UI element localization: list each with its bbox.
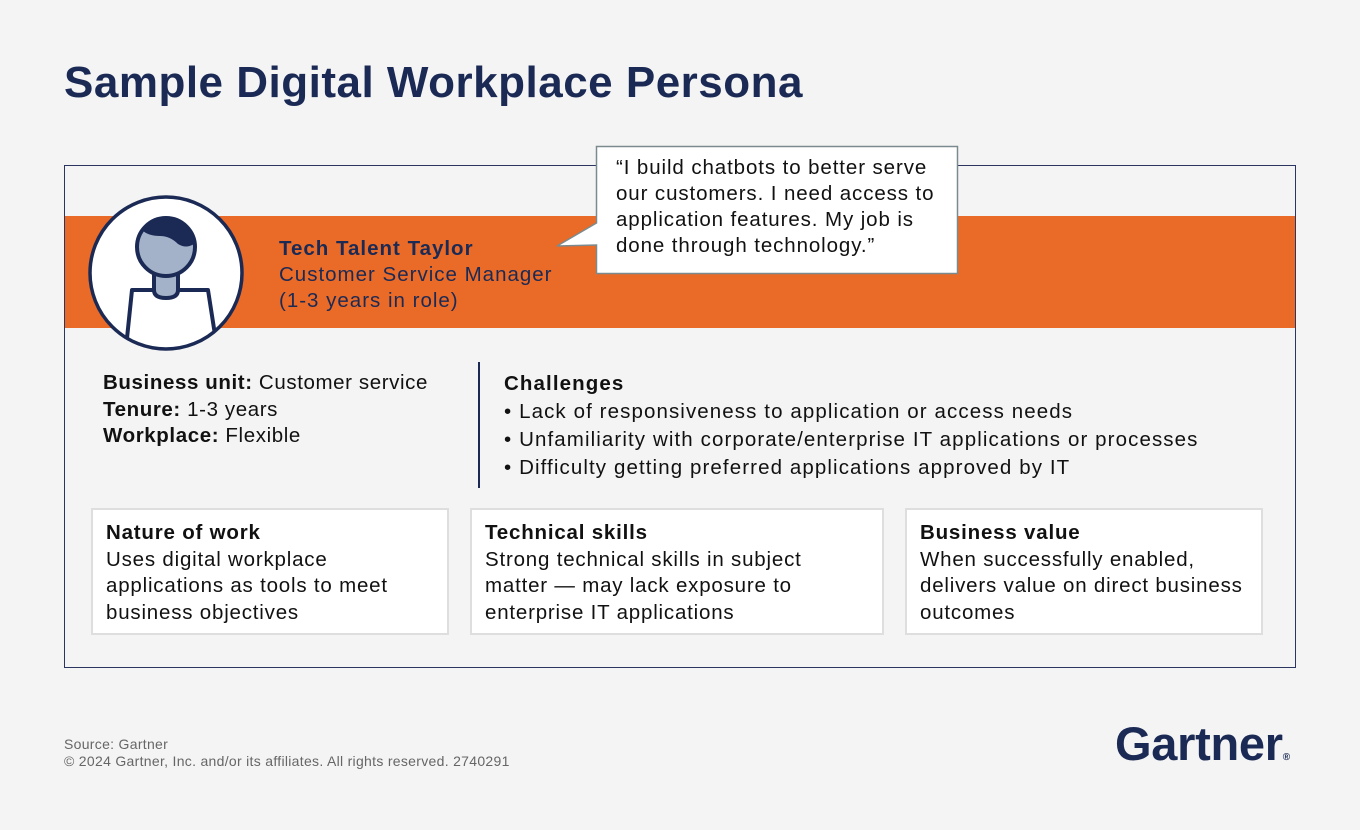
callout: quote bubble: our customers. I need access to [616, 182, 934, 205]
callout: quote bubble: application features. My job is [616, 208, 914, 231]
panel: technical skills: Technical skills [485, 521, 648, 544]
panel: technical skills: matter — may lack exposure to [485, 574, 792, 597]
persona name and role: (1-3 years in role) [279, 289, 459, 312]
panel: business value: When successfully enabled, [920, 548, 1195, 570]
panel: nature of work: business objectives [106, 600, 299, 624]
panel: nature of work [91, 508, 449, 635]
icon: avatar [88, 195, 244, 351]
panel: technical skills: enterprise IT applications [485, 600, 734, 624]
text block: challenges [504, 372, 1199, 479]
text block: challenges: Challenges [504, 372, 624, 395]
panel: persona frame [64, 165, 1296, 668]
title: Sample Digital Workplace Persona [64, 58, 803, 107]
footer source: © 2024 Gartner, Inc. and/or its affiliates. All rights reserved. 2740291 [64, 753, 510, 769]
logo: Gartner: Gartner® [1115, 717, 1290, 770]
text block: challenges: • Lack of responsiveness to application or access needs [504, 400, 1073, 423]
panel: technical skills [470, 508, 884, 635]
footer source [64, 736, 510, 769]
callout: quote bubble [556, 146, 958, 274]
panel: business value: delivers value on direct business [920, 574, 1243, 597]
panel: business value: Business value [920, 521, 1080, 544]
persona name and role: Customer Service Manager [279, 263, 553, 286]
callout: quote bubble: done through technology.” [616, 234, 875, 257]
orange band [65, 216, 1295, 328]
text block: attributes [103, 371, 428, 447]
text block: challenges: • Difficulty getting preferred applications approved by IT [504, 456, 1070, 479]
panel: business value: outcomes [920, 600, 1015, 624]
text block: attributes: Workplace: Flexible [103, 424, 301, 447]
text block: attributes: Business unit: Customer service [103, 371, 428, 394]
callout: quote bubble: “I build chatbots to better serve [616, 156, 927, 179]
text block: attributes: Tenure: 1-3 years [103, 398, 278, 420]
text block: challenges: • Unfamiliarity with corporate/enterprise IT applications or processes [504, 428, 1199, 451]
footer source: Source: Gartner [64, 736, 168, 752]
panel: nature of work: applications as tools to meet [106, 574, 388, 597]
persona name and role [279, 237, 553, 312]
panel: business value [905, 508, 1263, 635]
persona name and role: Tech Talent Taylor [279, 237, 474, 260]
panel: nature of work: Nature of work [106, 521, 261, 544]
panel: nature of work: Uses digital workplace [106, 548, 328, 570]
panel: technical skills: Strong technical skills in subject [485, 548, 802, 570]
